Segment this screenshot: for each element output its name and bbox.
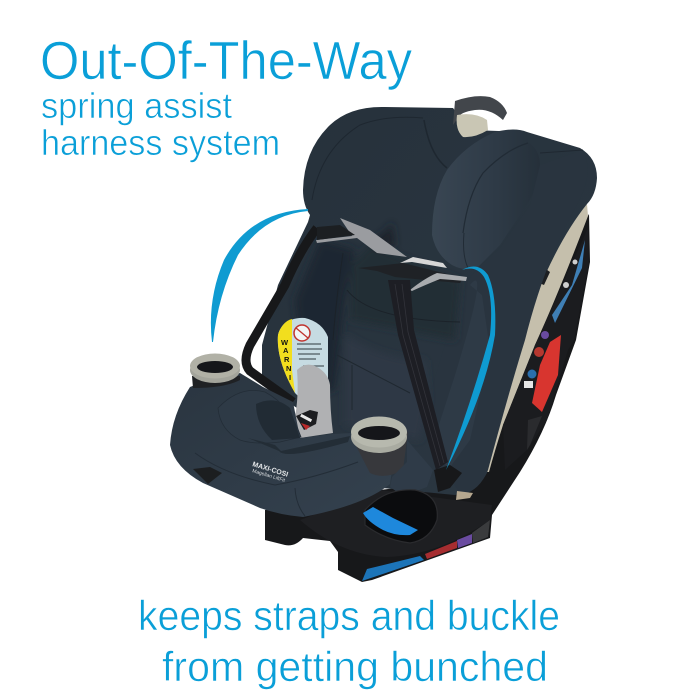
title — [40, 31, 412, 163]
seat cushion — [170, 373, 392, 517]
brand text on seat: Magellan LiftFit — [251, 468, 286, 484]
buckle pad — [295, 365, 333, 438]
colored base labels — [362, 520, 490, 581]
lower seat belt strap — [388, 280, 448, 470]
right blue arrow — [446, 266, 495, 470]
left blue arrow — [211, 209, 308, 342]
belt buckle — [434, 465, 473, 500]
side label panel — [503, 228, 589, 470]
left cup holder — [190, 354, 240, 388]
caption — [138, 592, 560, 690]
headrest wing — [432, 130, 540, 269]
subtitle: harness system — [41, 122, 280, 163]
warning word: N — [286, 364, 291, 373]
backrest shading — [295, 222, 460, 440]
warning word — [281, 338, 291, 382]
car seat product illustration — [170, 96, 597, 582]
brand text on seat: MAXI-COSI — [251, 461, 289, 479]
side bolster — [428, 150, 588, 495]
subtitle: spring assist — [41, 85, 232, 126]
caption: from getting bunched — [162, 643, 548, 690]
caption: keeps straps and buckle — [138, 592, 560, 639]
warning word: A — [283, 346, 289, 355]
front flap — [390, 440, 433, 496]
right cup holder — [351, 416, 408, 476]
blue release lever — [363, 490, 437, 543]
left shoulder pad and clip — [316, 218, 407, 257]
right shoulder pad and chest clip — [358, 257, 467, 291]
seat back shell — [262, 107, 597, 495]
headrest handle — [453, 96, 507, 137]
warning word: R — [284, 355, 290, 364]
left shoulder strap — [246, 228, 317, 402]
title: Out-Of-The-Way — [40, 31, 412, 91]
side tag — [527, 265, 550, 285]
base and shell — [265, 214, 590, 582]
warning label — [278, 318, 328, 396]
warning word: I — [289, 373, 291, 382]
warning word: W — [281, 338, 289, 347]
beige side panel — [486, 204, 588, 472]
subtitle — [41, 85, 280, 163]
